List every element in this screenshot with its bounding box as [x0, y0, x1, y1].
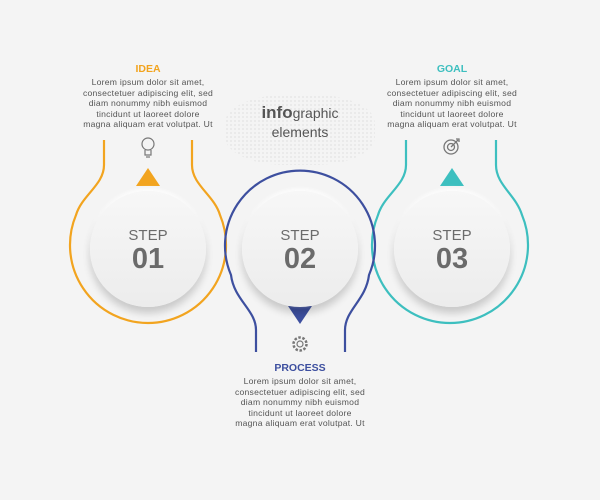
circle: step 1: 01 [132, 243, 164, 275]
text: process: consectetuer adipiscing elit, sed [235, 386, 365, 396]
circle: step 2: STEP [280, 227, 320, 244]
icon: bulb [142, 138, 154, 157]
circle: step 1 [90, 191, 206, 307]
title: elements [272, 124, 328, 140]
circle: step 3 [394, 191, 510, 307]
text: goal [387, 63, 517, 129]
text: idea: magna aliquam erat volutpat. Ut [83, 119, 213, 129]
text: process: Lorem ipsum dolor sit amet, [244, 376, 356, 386]
text: goal: diam nonummy nibh euismod [393, 98, 511, 108]
circle: step 2: 02 [284, 243, 316, 275]
text: idea: Lorem ipsum dolor sit amet, [92, 77, 204, 87]
text: process: PROCESS [274, 362, 326, 374]
text: idea: diam nonummy nibh euismod [89, 98, 207, 108]
text: goal: magna aliquam erat volutpat. Ut [387, 119, 517, 129]
circle: step 3: STEP [432, 227, 472, 244]
text: process: tincidunt ut laoreet dolore [248, 408, 352, 418]
title [261, 103, 339, 140]
text: idea: tincidunt ut laoreet dolore [96, 108, 200, 118]
text: idea: IDEA [135, 63, 161, 75]
outline: step 1 [70, 140, 226, 323]
text: goal: tincidunt ut laoreet dolore [400, 108, 504, 118]
text: process: magna aliquam erat volutpat. Ut [235, 418, 365, 428]
circle: step 3: 03 [436, 243, 468, 275]
outline: step 2 [225, 171, 375, 352]
outline: step 3 [372, 140, 528, 323]
text: goal: Lorem ipsum dolor sit amet, [396, 77, 508, 87]
text: idea: consectetuer adipiscing elit, sed [83, 88, 213, 98]
text: process: diam nonummy nibh euismod [241, 397, 359, 407]
text: goal: GOAL [437, 63, 467, 75]
title: infographic [261, 103, 339, 122]
text: idea [83, 63, 213, 129]
arrow: step 3 [440, 168, 464, 186]
text: process [235, 362, 365, 428]
arrow: step 2 [288, 306, 312, 324]
circle: step 2 [242, 191, 358, 307]
icon: target [444, 139, 459, 154]
world map background [225, 95, 375, 165]
arrow: step 1 [136, 168, 160, 186]
icon: gear [294, 338, 306, 350]
circle: step 1: STEP [128, 227, 168, 244]
text: goal: consectetuer adipiscing elit, sed [387, 88, 517, 98]
